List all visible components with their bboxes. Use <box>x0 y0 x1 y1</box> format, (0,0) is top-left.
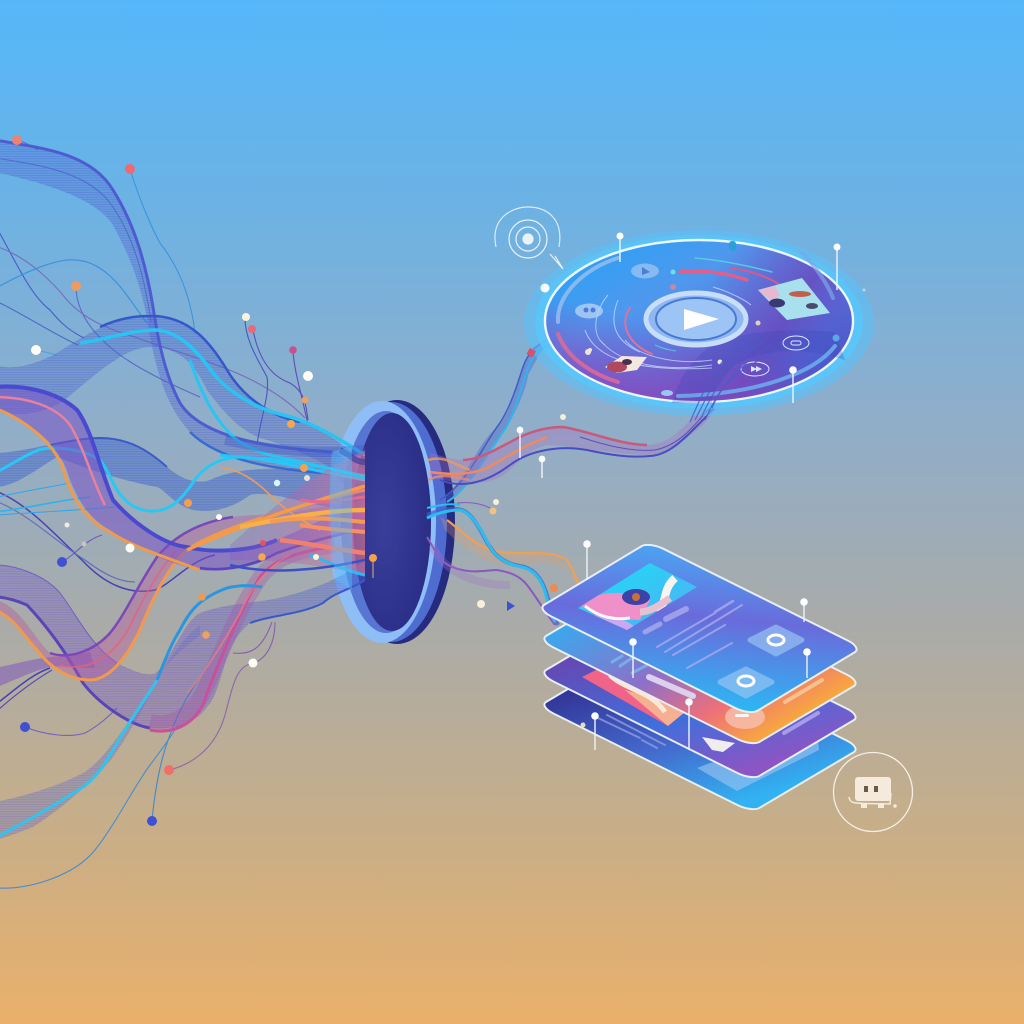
ribbon: translucent glow over ring <box>330 446 352 590</box>
ribbon: converging strands <box>187 440 365 575</box>
ribbon: upper blue <box>0 139 346 475</box>
disk icon: share outline <box>783 336 809 350</box>
disk outer arcs <box>558 253 835 396</box>
portal ring <box>328 400 455 644</box>
card icon chip upper <box>750 627 802 654</box>
disk ribbon shadow <box>672 330 845 403</box>
ribbon: blue to disk <box>440 338 552 503</box>
card icon chip lower <box>720 669 772 696</box>
disk face <box>545 240 853 402</box>
ribbon: orange red to disk <box>428 400 722 484</box>
ribbon: violet left rising band <box>0 652 95 688</box>
card picture <box>578 563 697 630</box>
ribbon: orange purple upper <box>0 387 365 571</box>
card 1: top <box>537 542 862 715</box>
node pin on portal <box>369 554 377 578</box>
disk halo <box>524 230 874 416</box>
play button <box>646 293 746 345</box>
media disk <box>524 230 874 416</box>
ribbon: orange rising <box>0 490 365 680</box>
ribbon: cyan lower left <box>0 586 262 840</box>
stacked interface cards <box>537 542 862 812</box>
card text lines <box>645 601 742 668</box>
store badge icon <box>834 752 912 832</box>
colored data nodes <box>12 135 566 826</box>
disk thin arcs <box>585 287 751 369</box>
card 2: orange <box>539 576 861 746</box>
disk small dots <box>585 241 840 396</box>
data ribbon bundles entering portal <box>0 140 365 840</box>
thin data lines with nodes <box>0 140 308 888</box>
target icon <box>495 207 563 269</box>
disk photo right <box>758 278 830 320</box>
disk icon: forward outline <box>741 362 769 376</box>
disk icon: people chip <box>575 304 603 318</box>
data ribbons leaving portal <box>427 338 722 625</box>
ribbon: mid blue <box>0 438 365 515</box>
ribbon: fan core into portal <box>230 450 365 575</box>
disk annotation pins <box>517 232 866 478</box>
ribbon overlay on disk <box>690 332 780 422</box>
card 3: purple <box>543 656 857 778</box>
card 4: dark base <box>539 642 861 812</box>
ribbon: orange to cards <box>440 516 578 584</box>
ribbon: pink rising <box>150 545 335 731</box>
disk icon: play chip <box>631 264 659 278</box>
ribbon: wide violet lower <box>0 560 365 728</box>
ribbon: violet to cards <box>427 503 555 625</box>
card annotation pins <box>583 540 811 750</box>
disk photo lower <box>605 356 647 373</box>
ribbon: second blue <box>0 316 365 490</box>
ribbon entry marker on disk edge <box>526 348 536 357</box>
ribbon: cyan to cards <box>427 504 558 625</box>
